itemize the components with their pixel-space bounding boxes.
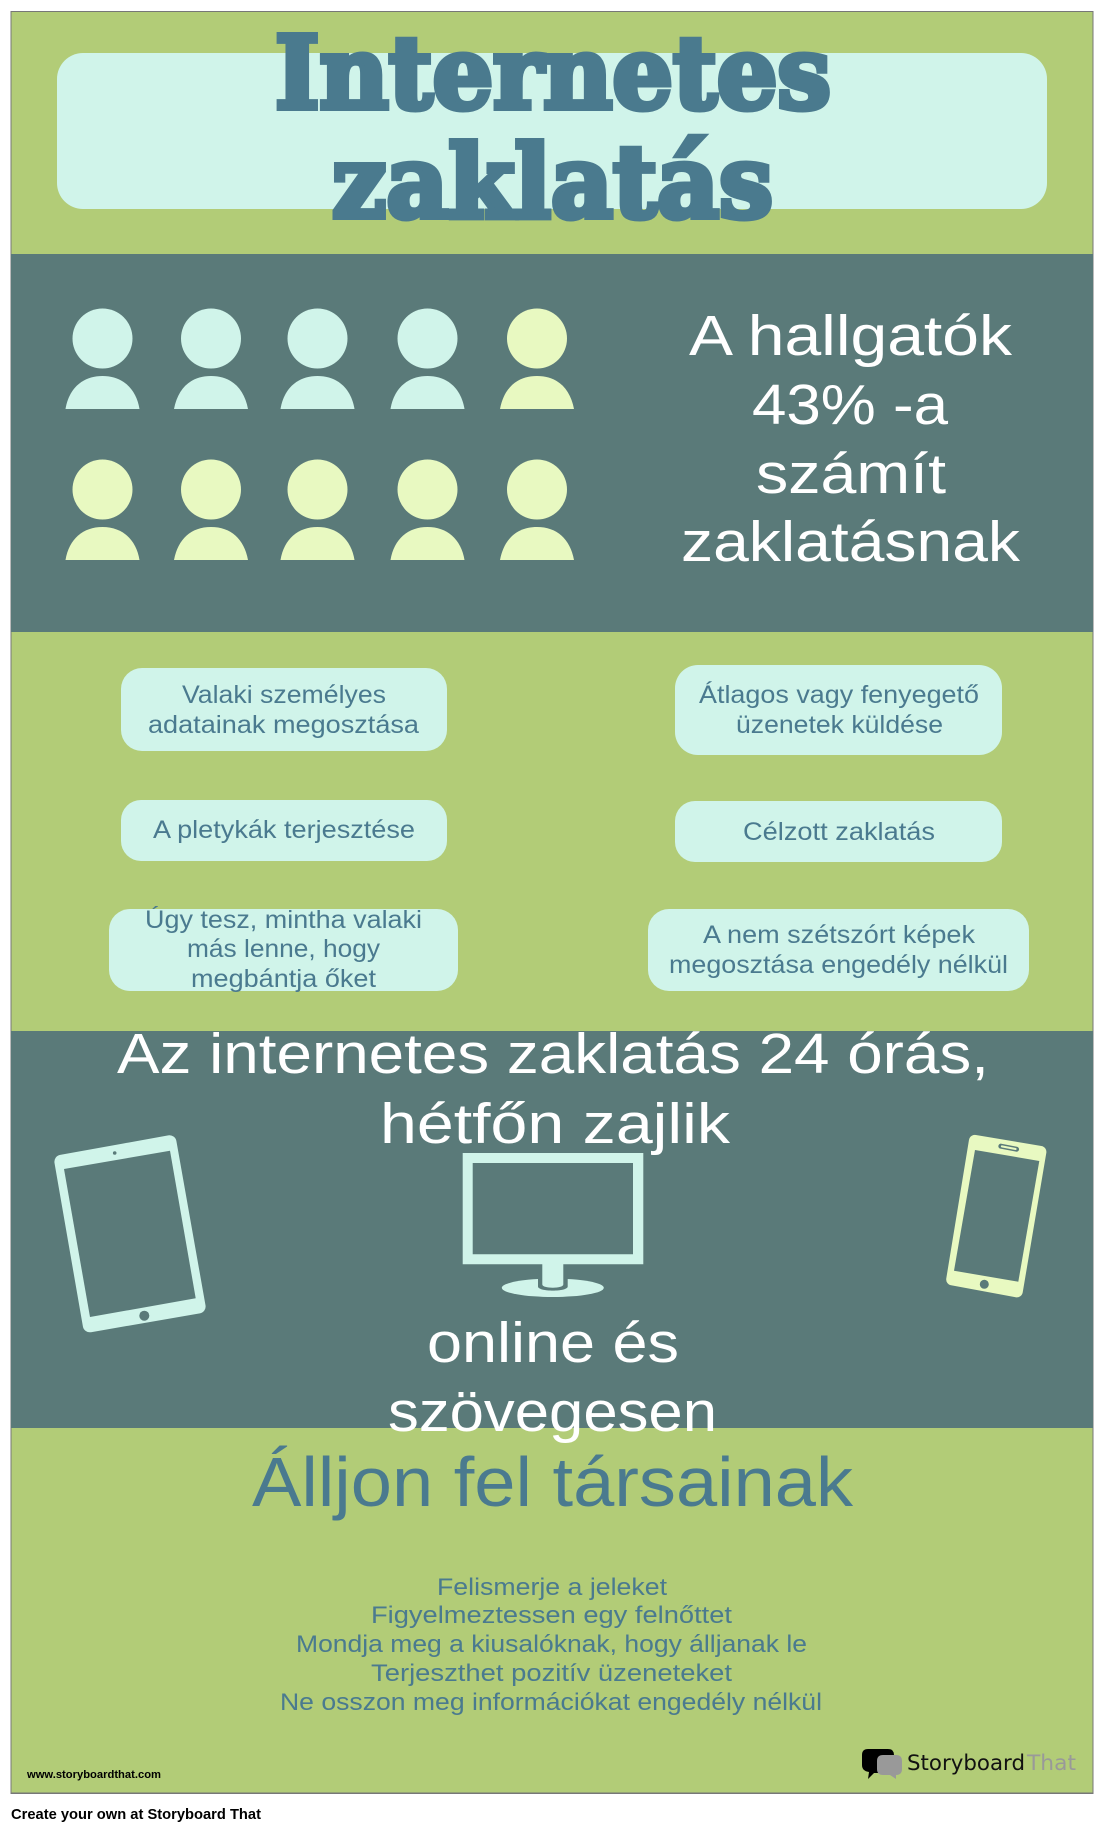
title background bbox=[57, 53, 1047, 209]
card: targeted harassment bbox=[675, 801, 1002, 862]
card: sharing images bbox=[648, 909, 1029, 991]
logo wordmark: Storyboard bbox=[907, 1751, 1025, 1775]
card: threatening messages: üzenetek küldése bbox=[736, 711, 943, 739]
advice list: Mondja meg a kiusalóknak, hogy álljanak le bbox=[296, 1631, 807, 1658]
logo: Storyboard That: That bbox=[1026, 1751, 1076, 1775]
panel: statistic bbox=[11, 254, 1093, 632]
logo: Storyboard That bbox=[862, 1749, 1076, 1779]
caption: online and text bbox=[388, 1311, 717, 1444]
card: sharing personal data: adatainak megosztása bbox=[148, 711, 419, 739]
advice list: Ne osszon meg információkat engedély nélkül bbox=[280, 1689, 822, 1716]
icons: ten people pictogram bbox=[66, 308, 574, 560]
card: impersonation bbox=[109, 905, 458, 993]
statistic text: zaklatásnak bbox=[681, 510, 1021, 574]
title bbox=[275, 14, 831, 241]
icon: monitor bbox=[463, 1153, 643, 1297]
card: sharing personal data: Valaki személyes bbox=[182, 681, 386, 709]
statistic text bbox=[681, 304, 1021, 574]
card: sharing images: megosztása engedély nélkül bbox=[669, 951, 1008, 979]
heading: 24 hours: Az internetes zaklatás 24 órás, bbox=[117, 1022, 989, 1086]
person row 2 bbox=[66, 460, 574, 560]
card: impersonation: más lenne, hogy bbox=[187, 935, 381, 963]
heading: 24 hours bbox=[117, 1022, 989, 1156]
card: spreading rumours bbox=[121, 800, 447, 861]
statistic text: A hallgatók bbox=[689, 304, 1013, 368]
card: targeted harassment: Célzott zaklatás bbox=[743, 818, 935, 846]
advice list: Figyelmeztessen egy felnőttet bbox=[371, 1602, 732, 1629]
panel: forms of harassment bbox=[109, 665, 1029, 993]
statistic text: számít bbox=[756, 442, 946, 506]
caption: online and text: szövegesen bbox=[388, 1380, 717, 1444]
highlighted person bbox=[500, 308, 574, 409]
person row 1 bbox=[66, 308, 464, 409]
icon: tablet bbox=[61, 1142, 199, 1325]
heading: stand up for peers: Álljon fel társainak bbox=[252, 1443, 854, 1521]
advice list: Terjeszthet pozitív üzeneteket bbox=[371, 1660, 732, 1687]
website note: www.storyboardthat.com bbox=[26, 1769, 161, 1781]
card: sharing personal data bbox=[121, 668, 447, 751]
panel: title bbox=[57, 14, 1047, 241]
statistic text: 43% -a bbox=[752, 373, 948, 437]
panel: always online bbox=[11, 1022, 1093, 1444]
card: sharing images: A nem szétszórt képek bbox=[703, 921, 976, 949]
card: impersonation: Úgy tesz, mintha valaki bbox=[145, 905, 422, 934]
advice list: Felismerje a jeleket bbox=[437, 1574, 667, 1601]
icon: speech bubbles bbox=[862, 1749, 902, 1779]
icon: smartphone bbox=[952, 1141, 1040, 1291]
caption: online and text: online és bbox=[427, 1311, 679, 1375]
advice list bbox=[280, 1574, 822, 1716]
heading: 24 hours: hétfőn zajlik bbox=[380, 1092, 731, 1156]
card: impersonation: megbántja őket bbox=[191, 965, 376, 993]
title: Internetes bbox=[275, 14, 831, 132]
card: spreading rumours: A pletykák terjesztése bbox=[153, 816, 415, 844]
panel: stand up bbox=[252, 1443, 854, 1716]
card: threatening messages: Átlagos vagy fenyegető bbox=[699, 680, 979, 709]
card: threatening messages bbox=[675, 665, 1002, 755]
title: zaklatás bbox=[332, 123, 773, 241]
footer credit: Create your own at Storyboard That bbox=[11, 1806, 261, 1823]
